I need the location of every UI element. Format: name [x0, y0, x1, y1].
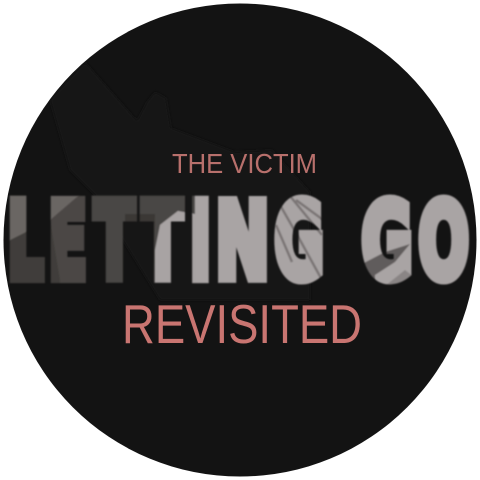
title: REVISITED: REVISITED: [122, 293, 362, 355]
headline: LETTING GO: [9, 194, 470, 286]
photo showing through the letters: [9, 194, 470, 286]
faint raised hand silhouette: [49, 62, 85, 100]
subtitle: THE VICTIM: THE VICTIM: [172, 148, 317, 179]
